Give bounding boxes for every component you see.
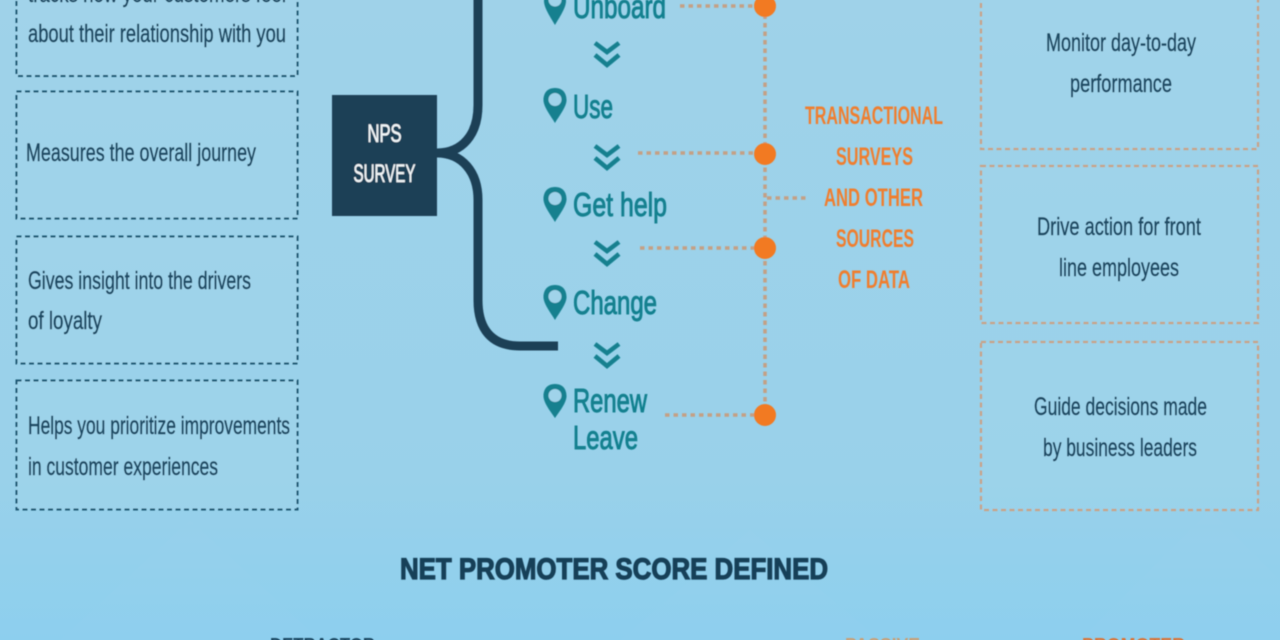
step: Unboard bbox=[544, 0, 666, 25]
icon: chevrons 4 bbox=[595, 344, 619, 366]
panel: tracks customer feelings: about their relationship with you bbox=[28, 20, 286, 48]
panel: drivers of loyalty bbox=[16, 236, 298, 364]
NPS survey box bbox=[332, 95, 437, 216]
panel: left benefits column bbox=[16, 0, 298, 510]
panel: tracks customer feelings bbox=[16, 0, 298, 76]
panel: front line employees: line employees bbox=[1059, 254, 1179, 282]
bracket connector bbox=[437, 0, 558, 346]
step: Get help: Get help bbox=[573, 186, 667, 223]
transactional surveys label: OF DATA bbox=[838, 266, 910, 294]
title: NET PROMOTER SCORE DEFINED bbox=[400, 553, 828, 586]
panel: overall journey: Measures the overall journey bbox=[26, 139, 256, 167]
panel: drivers of loyalty: of loyalty bbox=[28, 307, 102, 335]
step: Change: Change bbox=[573, 284, 657, 321]
panel: front line employees: Drive action for front bbox=[1037, 213, 1201, 241]
transactional surveys label: SURVEYS bbox=[836, 143, 913, 171]
step: Renew / Leave: Leave bbox=[573, 419, 638, 456]
step: Renew / Leave: Renew bbox=[573, 382, 647, 419]
dotted connector with orange nodes bbox=[638, 0, 807, 426]
panel: front line employees bbox=[981, 166, 1258, 323]
panel: business leaders: by business leaders bbox=[1043, 434, 1197, 462]
transactional surveys label: SOURCES bbox=[836, 225, 914, 253]
panel: day-to-day performance: Monitor day-to-day bbox=[1046, 29, 1196, 57]
icon: chevrons 1 bbox=[595, 43, 619, 65]
transactional surveys label: AND OTHER bbox=[824, 184, 923, 212]
panel: overall journey bbox=[16, 92, 298, 218]
panel: day-to-day performance bbox=[981, 0, 1258, 149]
panel: day-to-day performance: performance bbox=[1070, 70, 1172, 98]
panel: business leaders: Guide decisions made bbox=[1034, 393, 1207, 421]
icon: chevrons 2 bbox=[595, 146, 619, 168]
icon: chevrons 3 bbox=[595, 242, 619, 264]
panel: business leaders bbox=[981, 342, 1258, 510]
step: Use bbox=[544, 88, 613, 125]
NPS survey box: SURVEY bbox=[354, 160, 416, 188]
panel: prioritize improvements bbox=[16, 380, 298, 510]
panel: right uses column bbox=[981, 0, 1258, 510]
panel: drivers of loyalty: Gives insight into the drivers bbox=[28, 267, 251, 295]
step: Use: Use bbox=[573, 88, 613, 125]
transactional surveys label bbox=[805, 102, 943, 294]
panel: prioritize improvements: Helps you prioritize improvements bbox=[28, 412, 290, 440]
step: Renew / Leave bbox=[544, 382, 647, 456]
transactional surveys label: TRANSACTIONAL bbox=[805, 102, 943, 130]
step: Change bbox=[544, 284, 657, 321]
step: Get help bbox=[544, 186, 667, 223]
customer journey steps bbox=[544, 0, 667, 456]
panel: prioritize improvements: in customer experiences bbox=[28, 453, 218, 481]
NPS survey box: NPS bbox=[368, 120, 402, 148]
